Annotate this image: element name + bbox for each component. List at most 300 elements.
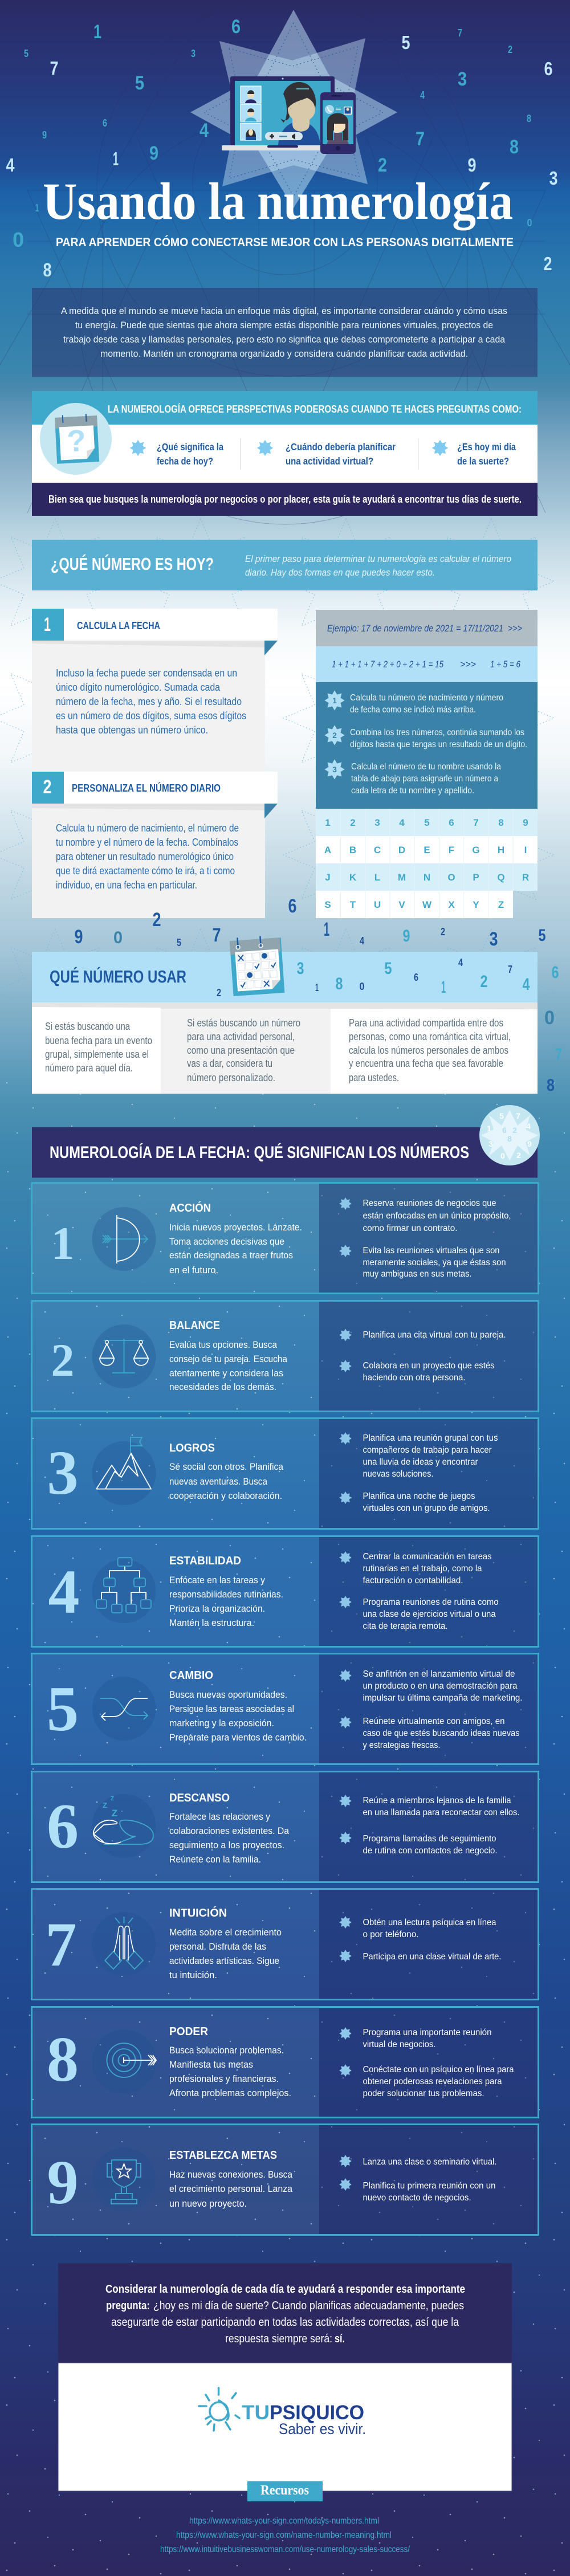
scattered numbers, middle: 1 — [324, 919, 329, 940]
scattered numbers, middle: 4 — [522, 975, 530, 994]
scattered numbers in the header: 1 — [93, 21, 101, 43]
letter-number table: 3 — [374, 817, 380, 828]
descanso text — [169, 1792, 290, 1865]
poder tips: virtual de negocios. — [363, 2040, 435, 2049]
balance tips: Planifica una cita virtual con tu pareja. — [363, 1330, 506, 1340]
acción tips: Reserva reuniones de negocios que — [363, 1199, 496, 1208]
establezca metas text: Haz nuevas conexiones. Busca — [169, 2169, 292, 2180]
question 1: ¿Qué significa la — [157, 441, 223, 453]
letter-number table: V — [398, 899, 405, 910]
panel: example calculation: >>> — [460, 659, 476, 670]
letter-number table: Z — [498, 899, 504, 910]
panel: qué número usar: QUÉ NÚMERO USAR — [50, 966, 186, 987]
title: Usando la numerología — [43, 172, 513, 230]
column text: shared: para ustedes. — [349, 1072, 399, 1083]
panel: logo area — [58, 2363, 512, 2491]
intuición text — [169, 1906, 282, 1980]
estabilidad text: Enfócate en las tareas y — [169, 1575, 265, 1585]
icon: question calendar: ? — [66, 423, 87, 459]
icon: checklist calendar — [230, 935, 284, 996]
descanso tips: de rutina con contactos de negocio. — [363, 1846, 497, 1856]
letter-number table: W — [422, 899, 432, 910]
scattered numbers in the header: 1 — [35, 202, 39, 214]
cambio text: Persigue las tareas asociadas al — [169, 1703, 294, 1714]
question 2 — [257, 440, 396, 467]
step star 2 — [324, 725, 345, 745]
sources list: https://www.intuitivebusinesswoman.com/use-numerology-sales-success/ — [160, 2545, 410, 2554]
column text: event: Si estás buscando una — [45, 1021, 131, 1032]
logros tips: nuevas soluciones. — [363, 1469, 433, 1479]
question 1: fecha de hoy? — [157, 455, 213, 467]
badge: recursos: Recursos — [260, 2483, 309, 2498]
panel: conclusion — [58, 2263, 512, 2363]
intuición tips: Participa en una clase virtual de arte. — [363, 1952, 502, 1962]
numeral 9: 9 — [47, 2147, 79, 2217]
estabilidad text: Mantén la estructura. — [169, 1617, 254, 1628]
logo: Tu Psiquico: Saber es vivir. — [279, 2420, 366, 2438]
panel: step 2: individuo, en una fecha en particular. — [56, 879, 197, 891]
logros tips: compañeros de trabajo para hacer — [363, 1445, 491, 1455]
panel: example calculation: cada letra de tu nombre y apellido. — [351, 786, 474, 796]
logros tips: una lluvia de ideas y encontrar — [363, 1457, 478, 1467]
balance text: Evalúa tus opciones. Busca — [169, 1339, 277, 1350]
acción text — [169, 1201, 302, 1275]
numeral 1: 1 — [51, 1217, 74, 1269]
panel: ¿Qué número es hoy?: diario. Hay dos formas en que puedes hacer esto. — [245, 567, 435, 578]
cambio tips: impulsar tu última campaña de marketing. — [363, 1693, 522, 1703]
poder text: Manifiesta tus metas — [169, 2059, 253, 2070]
scattered numbers, middle: 0 — [544, 1007, 555, 1029]
scattered numbers, middle: 3 — [296, 959, 304, 978]
icon: sleeping person — [92, 1794, 156, 1858]
estabilidad text — [169, 1555, 283, 1628]
letter-number table: P — [473, 872, 479, 883]
descanso tips — [339, 1795, 520, 1856]
panel: ¿Qué número es hoy? — [32, 540, 538, 590]
descanso tips: Reúne a miembros lejanos de la familia — [363, 1796, 511, 1805]
cambio tips: Se anfitrión en el lanzamiento virtual de — [363, 1669, 515, 1679]
scattered numbers, middle: 2 — [153, 909, 161, 931]
numeral 5: 5 — [47, 1674, 79, 1744]
icon: number wheel — [479, 1105, 540, 1165]
panel: step 1 — [32, 609, 278, 772]
estabilidad tips: Centrar la comunicación en tareas — [363, 1552, 492, 1562]
panel: step 2: 2 — [43, 776, 51, 798]
column text: shared: Para una actividad compartida entre dos — [349, 1017, 503, 1029]
letter-number table: U — [374, 899, 381, 910]
step star 1: 1 — [332, 696, 337, 705]
section heading: numerología de la fecha — [32, 1127, 538, 1177]
logros tips: Planifica una reunión grupal con tus — [363, 1433, 498, 1443]
panel: conclusion: pregunta: — [106, 2300, 150, 2312]
scattered numbers, middle: 2 — [480, 972, 488, 991]
poder tips — [339, 2027, 514, 2098]
letter-number table: O — [447, 872, 455, 883]
column text: personal: vas a dar, considera tu — [187, 1058, 272, 1069]
scattered numbers in the header: 3 — [191, 48, 196, 59]
establezca metas text: el crecimiento personal. Lanza — [169, 2183, 293, 2194]
letter-number table: Y — [473, 899, 479, 910]
cambio tips: Reúnete virtualmente con amigos, en — [363, 1717, 505, 1726]
panel: step 2: para obtener un resultado numerológico único — [56, 851, 234, 862]
scattered numbers in the header: 2 — [544, 253, 552, 274]
poder text: Busca solucionar problemas. — [169, 2045, 284, 2056]
step star 3 — [324, 759, 345, 780]
acción tips: están enfocadas en un único propósito, — [363, 1211, 511, 1221]
scattered numbers, middle: 1 — [315, 982, 319, 993]
sources list — [160, 2516, 410, 2554]
balance tips — [339, 1329, 506, 1383]
row 8: poder — [32, 2007, 538, 2118]
panel: step 2: que te dirá exactamente cómo te irá, a ti como — [56, 865, 235, 877]
letter-number table: R — [522, 872, 529, 883]
icon: number wheel: 2 — [516, 1151, 521, 1160]
row 9: establezca metas — [32, 2125, 538, 2235]
letter-number table: M — [398, 872, 406, 883]
estabilidad tips: facturación o contabilidad. — [363, 1576, 463, 1585]
column text: event — [45, 1021, 152, 1074]
column text: event: número para aquel día. — [45, 1062, 133, 1074]
descanso text: Fortalece las relaciones y — [169, 1811, 270, 1822]
balance text: consejo de tu pareja. Escucha — [169, 1354, 287, 1364]
column text: shared: y encuentra una fecha que sea favorable — [349, 1058, 503, 1069]
poder text: Afronta problemas complejos. — [169, 2088, 291, 2098]
question 2: ¿Cuándo debería planificar — [286, 441, 396, 453]
logo: Tu Psiquico — [199, 2388, 366, 2438]
intuición text: Medita sobre el crecimiento — [169, 1927, 282, 1938]
letter-number table — [316, 809, 538, 918]
sources list: https://www.whats-your-sign.com/todays-numbers.html — [189, 2516, 379, 2526]
scattered numbers, middle: 9 — [74, 926, 83, 948]
letter-number table: I — [524, 845, 527, 855]
sources list: https://www.whats-your-sign.com/name-number-meaning.html — [176, 2530, 392, 2540]
scattered numbers in the header: 5 — [401, 32, 410, 53]
scattered numbers, middle — [74, 895, 562, 1095]
column text: personal: como una presentación que — [187, 1045, 295, 1056]
scattered numbers in the header — [6, 16, 557, 280]
panel: intro text: momento. Mantén un cronograma organizado y considera cuándo planificar cada actividad. — [100, 348, 468, 359]
panel: step 1: hasta que obtengas un número único. — [56, 724, 208, 736]
poder text: PODER — [169, 2025, 209, 2038]
letter-number table: S — [324, 899, 331, 910]
scattered numbers, middle: 0 — [113, 928, 123, 947]
letter-number table: Q — [497, 872, 505, 883]
poder tips: obtener poderosas revelaciones para — [363, 2077, 502, 2086]
icon: sleeping person: Z — [111, 1796, 114, 1802]
panel: intro text: trabajo desde casa y llamadas personales, pero esto no significa que debas comprometerte a participar a cada — [63, 334, 506, 345]
row 6: descanso — [32, 1771, 538, 1882]
letter-number table: A — [324, 845, 331, 855]
estabilidad text: Prioriza la organización. — [169, 1603, 265, 1614]
acción text: en el futuro. — [169, 1265, 218, 1275]
panel: example calculation: Ejemplo: 17 de noviembre de 2021 = 17/11/2021 >>> — [327, 623, 522, 634]
panel: step 1: CALCULA LA FECHA — [77, 620, 160, 631]
column text: shared — [349, 1017, 511, 1083]
letter-number table: N — [424, 872, 430, 883]
scattered numbers, middle: 6 — [552, 963, 559, 982]
panel: example calculation: de fecha como se indicó más arriba. — [350, 705, 476, 715]
letter-number table: B — [349, 845, 356, 855]
cambio tips: un producto o en una demostración para — [363, 1681, 518, 1691]
cambio text: CAMBIO — [169, 1669, 213, 1682]
balance text: necesidades de los demás. — [169, 1381, 276, 1392]
letter-number table: L — [374, 872, 380, 883]
panel: conclusion: respuesta siempre será: — [225, 2333, 332, 2345]
icon: sleeping person: Z — [103, 1801, 107, 1809]
row 4: estabilidad — [32, 1536, 538, 1647]
letter-number table: 7 — [473, 817, 479, 828]
icon: number wheel: 6 — [502, 1126, 507, 1135]
panel: ¿Qué número es hoy?: ¿QUÉ NÚMERO ES HOY? — [51, 553, 214, 574]
estabilidad tips: cita de terapia remota. — [363, 1621, 448, 1631]
descanso tips: Programa llamadas de seguimiento — [363, 1834, 496, 1844]
panel: conclusion: ¿hoy es mi día de suerte? Cuando planificas adecuadamente, puedes — [153, 2300, 464, 2312]
intuición text: actividades artísticas. Sigue — [169, 1955, 279, 1966]
descanso text: seguimiento a los proyectos. — [169, 1840, 284, 1851]
scattered numbers in the header: 5 — [24, 48, 28, 59]
letter-number table: 4 — [399, 817, 405, 828]
establezca metas text: ESTABLEZCA METAS — [169, 2149, 277, 2162]
icon: organization chart — [92, 1558, 156, 1623]
panel: step 2 — [32, 772, 278, 918]
panel: step 2: tu nombre y el número de la fecha. Combínalos — [56, 837, 238, 848]
logros tips: Planifica una noche de juegos — [363, 1491, 475, 1501]
letter-number table: F — [449, 845, 454, 855]
step star 1 — [324, 690, 345, 711]
estabilidad text: ESTABILIDAD — [169, 1555, 241, 1567]
icon: bow and arrow — [92, 1207, 156, 1271]
scattered numbers, middle: 9 — [402, 927, 410, 945]
letter-number table: T — [350, 899, 356, 910]
panel: step 1: es un número de dos dígitos, suma esos dígitos — [56, 710, 246, 722]
icon: crossing arrows — [92, 1677, 156, 1741]
panel: example calculation: Calcula el número de tu nombre usando la — [351, 762, 501, 772]
icon: number wheel: 4 — [526, 1122, 531, 1131]
acción tips: muy ambiguas en sus metas. — [363, 1269, 472, 1279]
panel: intro text: tu energía. Puede que sientas que ahora siempre estás disponible para reuniones virtuales, proyectos de — [75, 320, 493, 331]
logros text: nuevas aventuras. Busca — [169, 1476, 267, 1487]
column text: shared: calcula los números personales de ambos — [349, 1045, 508, 1056]
establezca metas tips — [339, 2155, 497, 2203]
scattered numbers, middle: 8 — [335, 975, 343, 993]
estabilidad tips: rutinarias en el trabajo, como la — [363, 1564, 482, 1574]
panel: step 1: Incluso la fecha puede ser condensada en un — [56, 667, 237, 679]
icon: number wheel: 7 — [516, 1111, 520, 1120]
scattered numbers in the header: 9 — [467, 154, 477, 176]
column text: personal: para una actividad personal, — [187, 1031, 295, 1042]
row 2: balance — [32, 1301, 538, 1411]
intuición tips: o por teléfono. — [363, 1930, 418, 1939]
logros tips: virtuales con un grupo de amigos. — [363, 1503, 490, 1513]
icon: number wheel: 5 — [499, 1111, 504, 1120]
panel: qué número usar — [32, 952, 538, 1094]
scattered numbers, middle: 2 — [441, 926, 445, 938]
icon: target and arrow — [92, 2029, 156, 2093]
column text: personal: Si estás buscando un número — [187, 1017, 300, 1029]
poder tips: Conéctate con un psíquico en línea para — [363, 2065, 514, 2074]
panel: ¿Qué número es hoy?: El primer paso para determinar tu numerología es calcular el número — [245, 553, 511, 564]
panel: example calculation: 1 + 5 = 6 — [490, 659, 520, 670]
logo: Tu Psiquico: PSIQUICO — [270, 2402, 364, 2424]
letter-number table: J — [325, 872, 331, 883]
scattered numbers, middle: 7 — [555, 1045, 562, 1064]
question 3: de la suerte? — [457, 455, 509, 467]
establezca metas tips: Planifica tu primera reunión con un — [363, 2181, 496, 2191]
letter-number table: 1 — [325, 817, 331, 828]
estabilidad tips — [339, 1551, 498, 1631]
laptop with video call — [222, 76, 335, 150]
intuición tips: Obtén una lectura psíquica en línea — [363, 1918, 496, 1927]
scattered numbers, middle: 0 — [359, 981, 365, 992]
poder tips: Programa una importante reunión — [363, 2028, 491, 2037]
logros tips — [339, 1432, 498, 1513]
cambio tips: y estrategias frescas. — [363, 1741, 440, 1750]
scattered numbers in the header: 9 — [42, 129, 47, 141]
acción text: ACCIÓN — [169, 1201, 211, 1214]
intuición text: INTUICIÓN — [169, 1906, 227, 1919]
estabilidad tips: una clase de ejercicios virtual o una — [363, 1609, 496, 1619]
row 1: acción — [32, 1183, 538, 1294]
panel: intro text: A medida que el mundo se mueve hacia un enfoque más digital, es importante considerar cuándo y cómo usas — [61, 305, 507, 316]
panel: step 2: PERSONALIZA EL NÚMERO DIARIO — [72, 782, 221, 794]
cambio tips — [339, 1669, 522, 1750]
icon: number wheel: 9 — [527, 1139, 532, 1148]
acción tips: como firmar un contrato. — [363, 1224, 457, 1233]
panel: conclusion: sí. — [335, 2333, 345, 2345]
scattered numbers in the header: 8 — [43, 259, 51, 280]
scattered numbers in the header: 4 — [199, 120, 209, 141]
panel: example calculation — [316, 610, 538, 809]
panel: intro text — [32, 288, 538, 377]
letter-number table: X — [448, 899, 455, 910]
scattered numbers in the header: 8 — [527, 113, 531, 124]
column text: shared: personas, como una romántica cita virtual, — [349, 1031, 511, 1042]
icon: sleeping person: Z — [112, 1808, 117, 1819]
question 3: ¿Es hoy mi día — [457, 441, 516, 453]
balance text: BALANCE — [169, 1319, 220, 1332]
scattered numbers in the header: 2 — [508, 44, 512, 55]
panel: step 2: Calcula tu número de nacimiento, el número de — [56, 822, 239, 834]
letter-number table: G — [472, 845, 480, 855]
logros text: Sé social con otros. Planifica — [169, 1461, 283, 1472]
icon: number wheel: 1 — [487, 1124, 491, 1133]
panel: questions — [32, 391, 538, 516]
establezca metas text: un nuevo proyecto. — [169, 2198, 247, 2209]
scattered numbers in the header: 6 — [544, 58, 553, 79]
letter-number table: 8 — [498, 817, 504, 828]
establezca metas tips: nuevo contacto de negocios. — [363, 2193, 471, 2203]
scattered numbers, middle: 4 — [360, 935, 364, 947]
scattered numbers, middle: 2 — [217, 987, 221, 998]
column text: event: buena fecha para un evento — [45, 1035, 152, 1046]
balance tips: Colabora en un proyecto que estés — [363, 1361, 495, 1371]
logo: Tu Psiquico: TU — [242, 2402, 270, 2424]
panel: example calculation: dígitos hasta que tengas un resultado de un dígito. — [350, 740, 527, 749]
letter-number table: K — [349, 872, 357, 883]
acción tips: meramente sociales, ya que éstas son — [363, 1258, 506, 1267]
numeral 8: 8 — [47, 2024, 79, 2095]
descanso tips: en una llamada para reconectar con ellos. — [363, 1808, 520, 1817]
acción text: Inicia nuevos proyectos. Lánzate. — [169, 1222, 302, 1233]
estabilidad text: responsabilidades rutinarias. — [169, 1589, 283, 1600]
step star 2: 2 — [332, 731, 337, 740]
section heading: numerología de la fecha: NUMEROLOGÍA DE LA FECHA: QUÉ SIGNIFICAN LOS NÚMEROS — [50, 1143, 469, 1162]
letter-number table: C — [374, 845, 381, 855]
poder text — [169, 2025, 291, 2098]
scattered numbers in the header: 4 — [420, 89, 425, 101]
scattered numbers in the header: 3 — [549, 168, 557, 189]
letter-number table: 2 — [350, 817, 356, 828]
intuición tips — [339, 1916, 502, 1962]
scattered numbers, middle: 7 — [508, 964, 512, 975]
panel: step 1: número de la fecha, mes y año. Si el resultado — [56, 696, 242, 707]
balance text: atentamente y considera las — [169, 1368, 283, 1379]
row 3: logros — [32, 1418, 538, 1529]
balance text — [169, 1319, 287, 1392]
icon: number wheel: 2 — [512, 1126, 517, 1135]
scattered numbers in the header: 9 — [149, 142, 158, 164]
cambio text: Busca nuevas oportunidades. — [169, 1689, 287, 1700]
panel: step 1: 1 — [44, 614, 51, 635]
row 7: intuición — [32, 1889, 538, 1999]
poder tips: poder solucionar tus problemas. — [363, 2089, 484, 2098]
scattered numbers, middle: 5 — [384, 959, 392, 978]
question 1 — [130, 440, 223, 467]
icon: mountain with flag — [92, 1437, 156, 1505]
scattered numbers in the header: 2 — [378, 154, 387, 176]
icon: question calendar — [40, 403, 112, 475]
acción text: Toma acciones decisivas que — [169, 1236, 284, 1247]
row 5: cambio — [32, 1654, 538, 1764]
logros text — [169, 1442, 283, 1501]
acción text: están designadas a traer frutos — [169, 1250, 293, 1261]
numeral 4: 4 — [48, 1557, 80, 1627]
subtitle: PARA APRENDER CÓMO CONECTARSE MEJOR CON LAS PERSONAS DIGITALMENTE — [56, 235, 514, 249]
panel: example calculation: 1 + 1 + 1 + 7 + 2 + 0 + 2 + 1 = 15 — [332, 659, 443, 670]
numeral 7: 7 — [46, 1910, 76, 1979]
scattered numbers, middle: 8 — [547, 1076, 555, 1095]
scattered numbers, middle: 7 — [212, 924, 221, 946]
icon: trophy — [92, 2147, 156, 2211]
cambio text: marketing y la exposición. — [169, 1718, 274, 1729]
scattered numbers, middle: 4 — [458, 957, 463, 968]
panel: conclusion: asegurarte de estar participando en todas las actividades correctas, así que la — [111, 2316, 459, 2329]
letter-number table: 5 — [424, 817, 430, 828]
panel: conclusion: Considerar la numerología de cada día te ayudará a responder esa importante — [105, 2283, 465, 2296]
column text: personal: número personalizado. — [187, 1072, 275, 1083]
descanso text: colaboraciones existentes. Da — [169, 1825, 290, 1836]
letter-number table: E — [424, 845, 430, 855]
balance tips: haciendo con otra persona. — [363, 1373, 465, 1383]
step star 3: 3 — [332, 765, 337, 774]
cambio text: Prepárate para vientos de cambio. — [169, 1732, 307, 1743]
scattered numbers in the header: 7 — [458, 27, 462, 39]
logros text: cooperación y colaboración. — [169, 1490, 282, 1501]
letter-number table: 6 — [449, 817, 454, 828]
scattered numbers, middle: 6 — [414, 972, 418, 983]
icon: number wheel: 0 — [500, 1151, 505, 1160]
numeral 2: 2 — [51, 1334, 74, 1386]
panel: example calculation: Calcula tu número de nacimiento y número — [350, 693, 503, 703]
scattered numbers in the header: 7 — [416, 128, 425, 150]
descanso text: DESCANSO — [169, 1792, 230, 1804]
cambio text — [169, 1669, 307, 1743]
scattered numbers in the header: 6 — [231, 16, 241, 38]
scattered numbers in the header: 0 — [13, 228, 24, 251]
panel: example calculation: Combina los tres números, continúa sumando los — [350, 728, 524, 737]
logros text: LOGROS — [169, 1442, 215, 1454]
question 2: una actividad virtual? — [286, 455, 373, 467]
